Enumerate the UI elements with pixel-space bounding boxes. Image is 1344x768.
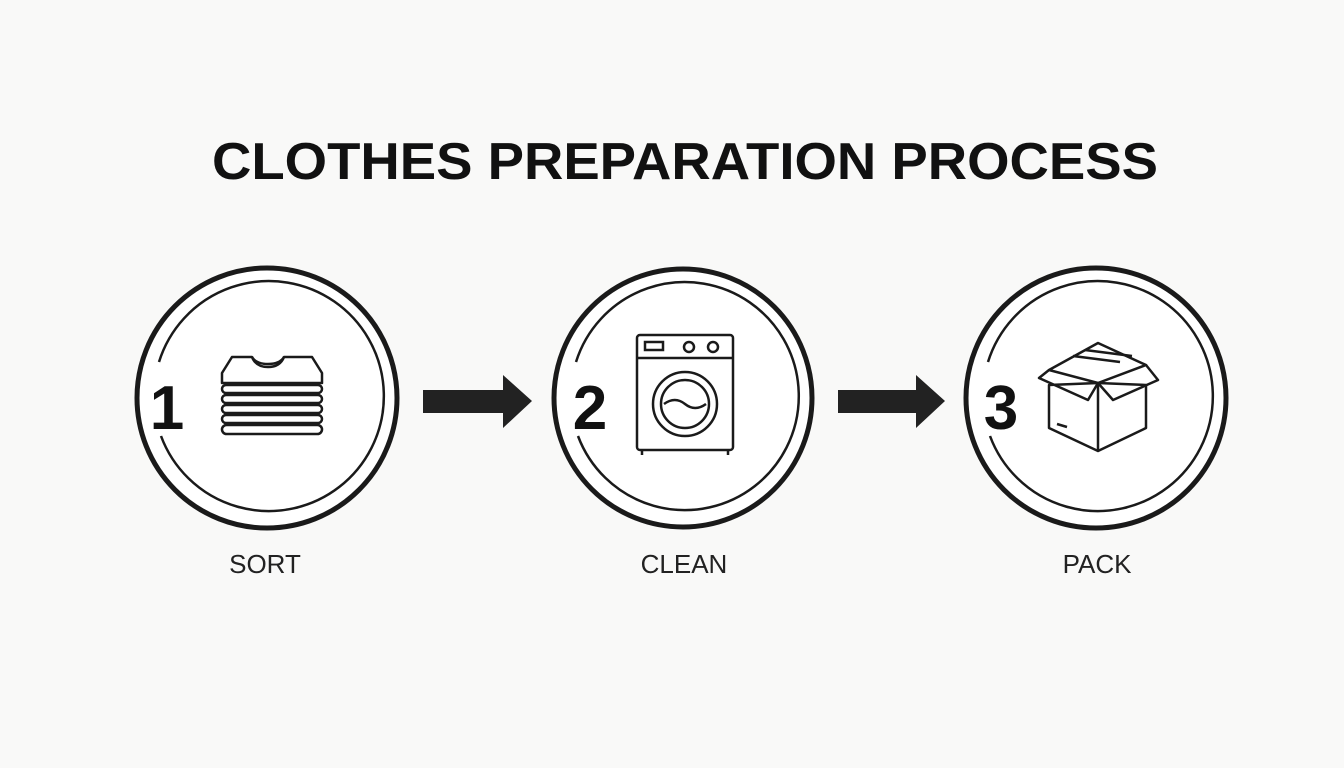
arrow 2 [838, 375, 945, 428]
icon: folded shirts [222, 357, 322, 434]
number 3: 3 [984, 374, 1018, 443]
label: PACK: PACK [1063, 549, 1132, 579]
arrow 1 [423, 375, 532, 428]
icon: washing machine [637, 335, 733, 455]
icon: box [1039, 343, 1158, 451]
title: CLOTHES PREPARATION PROCESS [212, 133, 1158, 191]
number 1: 1 [150, 374, 184, 443]
number 2: 2 [573, 374, 607, 443]
step 3: pack [966, 268, 1226, 528]
label: SORT: SORT [229, 549, 301, 579]
label: CLEAN: CLEAN [641, 549, 727, 579]
step 2: clean [554, 269, 812, 527]
step 1: sort [137, 268, 397, 528]
